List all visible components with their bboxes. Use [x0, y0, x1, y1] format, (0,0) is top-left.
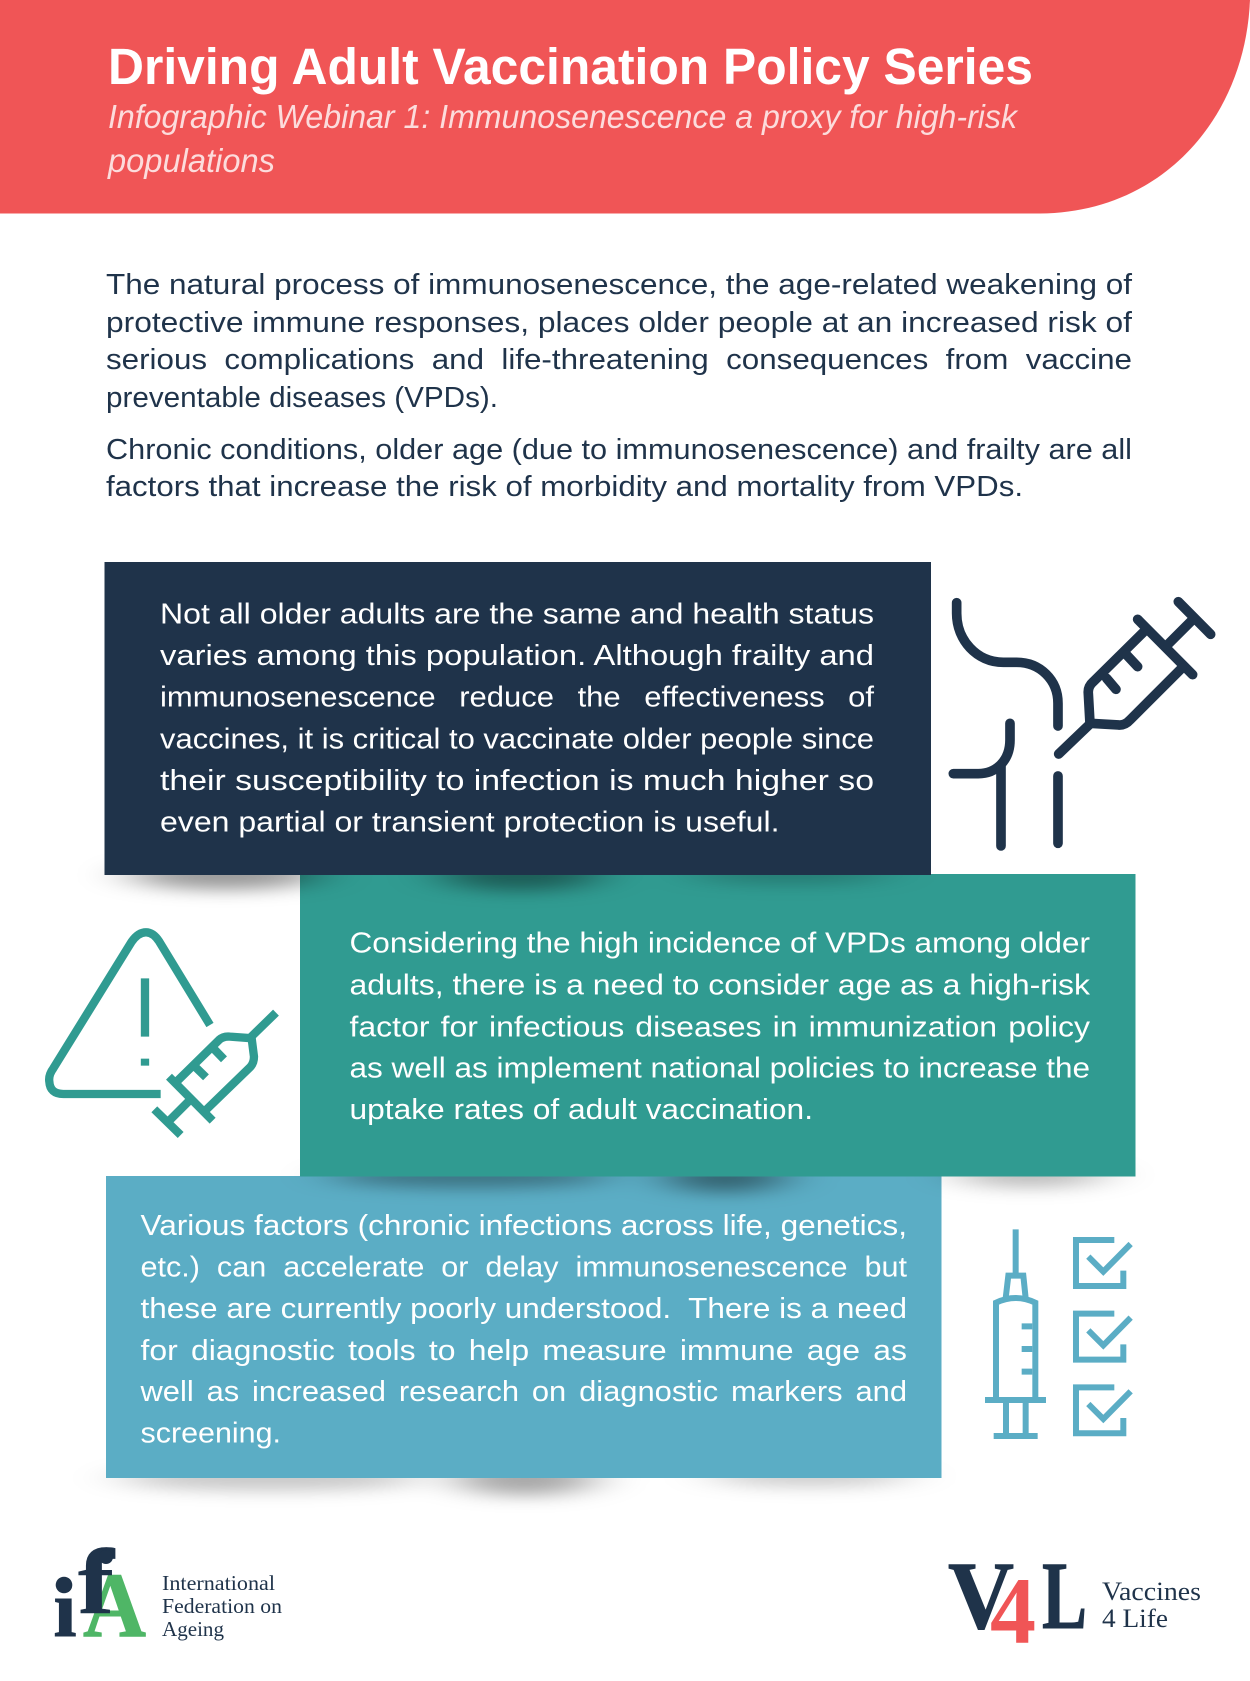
paragraph: immunosenescence: preventable diseases (VPDs). — [106, 382, 498, 414]
paragraph: chronic conditions: Chronic conditions, older age (due to immunosenescence) and frailty are all — [106, 434, 1132, 466]
paragraph: immunosenescence: The natural process of immunosenescence, the age-related weakening of — [106, 269, 1133, 301]
panel text: these are currently poorly understood. There is a need — [140, 1293, 907, 1325]
logo: Vaccines 4 Life: V — [948, 1542, 1014, 1649]
paragraph: chronic conditions — [106, 434, 1132, 503]
intro text — [106, 269, 1133, 503]
panel text: immunosenescence reduce the effectiveness of — [160, 682, 875, 714]
subtitle: Infographic Webinar 1: Immunosenescence a proxy for high-risk — [108, 98, 1018, 135]
panel text: as well as implement national policies to increase the — [350, 1052, 1090, 1084]
paragraph: immunosenescence — [106, 269, 1133, 414]
paragraph: immunosenescence: protective immune responses, places older people at an increased risk of — [106, 307, 1133, 339]
logo: International Federation on Ageing — [54, 1531, 283, 1656]
shadow under policy panel — [330, 1161, 1105, 1193]
shadow under health status panel — [130, 859, 890, 891]
icon: arm and syringe — [953, 602, 1211, 846]
subtitle: populations — [107, 142, 275, 179]
logo: International Federation on Ageing: International — [162, 1571, 275, 1595]
panel: policy — [300, 874, 1136, 1176]
logo: International Federation on Ageing: Federation on — [162, 1594, 283, 1618]
panel text: Not all older adults are the same and health status — [160, 598, 874, 630]
logo: International Federation on Ageing: Ageing — [162, 1617, 224, 1641]
panel text: Considering the high incidence of VPDs among older — [350, 928, 1090, 960]
logo: Vaccines 4 Life: Vaccines — [1102, 1577, 1201, 1606]
icon: syringe and checklist — [985, 1229, 1131, 1436]
logo: International Federation on Ageing: i — [54, 1566, 76, 1654]
paragraph: chronic conditions: factors that increase the risk of morbidity and mortality from VPDs. — [106, 471, 1023, 503]
panel text: even partial or transient protection is useful. — [160, 806, 780, 838]
panel text: for diagnostic tools to help measure immune age as — [140, 1335, 907, 1367]
panel text — [160, 598, 875, 838]
title: Driving Adult Vaccination Policy Series — [108, 38, 1033, 95]
panel: health status — [104, 562, 931, 875]
logo: International Federation on Ageing: A — [83, 1554, 146, 1656]
panel: diagnostics — [106, 1176, 942, 1478]
panel text: screening. — [140, 1418, 281, 1450]
header banner — [0, 0, 1250, 214]
subtitle — [107, 98, 1018, 179]
panel text: etc.) can accelerate or delay immunosenescence but — [140, 1252, 907, 1284]
shadow under diagnostics panel — [120, 1462, 910, 1496]
icon: warning triangle and syringe — [49, 932, 276, 1135]
logo: Vaccines 4 Life: 4 — [990, 1558, 1036, 1664]
panel text: their susceptibility to infection is much higher so — [160, 765, 874, 797]
panel text — [350, 928, 1091, 1126]
panel text: adults, there is a need to consider age as a high-risk — [350, 970, 1091, 1002]
logo: Vaccines 4 Life — [948, 1542, 1201, 1664]
panel text — [139, 1210, 907, 1450]
panel text: varies among this population. Although frailty and — [160, 640, 874, 672]
panel text: vaccines, it is critical to vaccinate older people since — [160, 724, 874, 756]
panel text: factor for infectious diseases in immunization policy — [350, 1012, 1091, 1044]
logo: Vaccines 4 Life: L — [1042, 1542, 1087, 1649]
logo: International Federation on Ageing: f — [78, 1531, 115, 1634]
panel text: Various factors (chronic infections across life, genetics, — [140, 1210, 907, 1242]
panel text: uptake rates of adult vaccination. — [350, 1094, 813, 1126]
logo: Vaccines 4 Life: 4 Life — [1102, 1604, 1168, 1633]
paragraph: immunosenescence: serious complications and life-threatening consequences from vaccine — [106, 344, 1132, 376]
panel text: well as increased research on diagnostic markers and — [139, 1376, 907, 1408]
